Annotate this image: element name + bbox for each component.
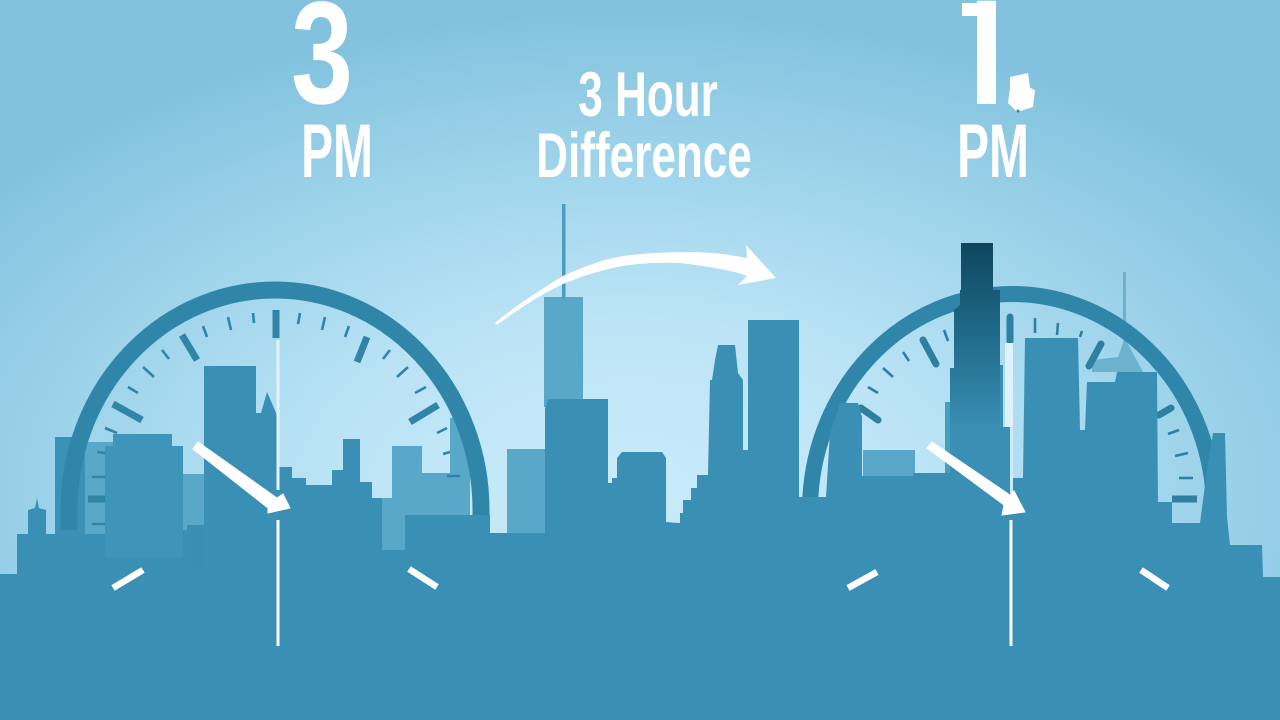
right clock hands (848, 343, 1168, 646)
right pale band behind hand (1005, 343, 1013, 427)
left hour hand (193, 442, 290, 513)
heading: 3 hour difference: 3 Hour (578, 59, 718, 130)
left building behind clock ring (55, 437, 85, 547)
left clock (69, 290, 481, 530)
right hour hand (927, 442, 1025, 515)
left second hand upper (276, 340, 280, 490)
white smudge next to number (1008, 73, 1035, 112)
left clock hands (113, 340, 437, 646)
heading: right time (960, 0, 1035, 177)
small dark building left clock (187, 525, 204, 571)
left clock ring (69, 290, 481, 530)
heading: 3 hour difference: Difference (536, 120, 752, 191)
left clock major ticks (88, 310, 438, 499)
left second hand lower (276, 520, 280, 646)
right PM label: PM (957, 110, 1029, 194)
tall dark tower (950, 243, 1000, 430)
background skyline (78, 204, 1143, 553)
right second hand lower (1010, 520, 1012, 646)
right lower ticks (848, 570, 1168, 588)
flag of the numeral (962, 3, 978, 16)
heading: 3 hour difference (536, 59, 752, 191)
arrow: 3 hour shift (495, 245, 776, 325)
left clock minor ticks (92, 313, 460, 524)
right clock (810, 294, 1214, 530)
front skyline (0, 310, 1280, 720)
mid building left clock (105, 434, 183, 557)
right clock major ticks (861, 317, 1197, 499)
heading: left time (291, 0, 373, 194)
right second hand upper (1010, 427, 1013, 493)
right clock minor ticks (868, 318, 1193, 478)
right clock ring (810, 294, 1214, 530)
left PM label: PM (301, 110, 373, 194)
left lower ticks (113, 569, 437, 588)
